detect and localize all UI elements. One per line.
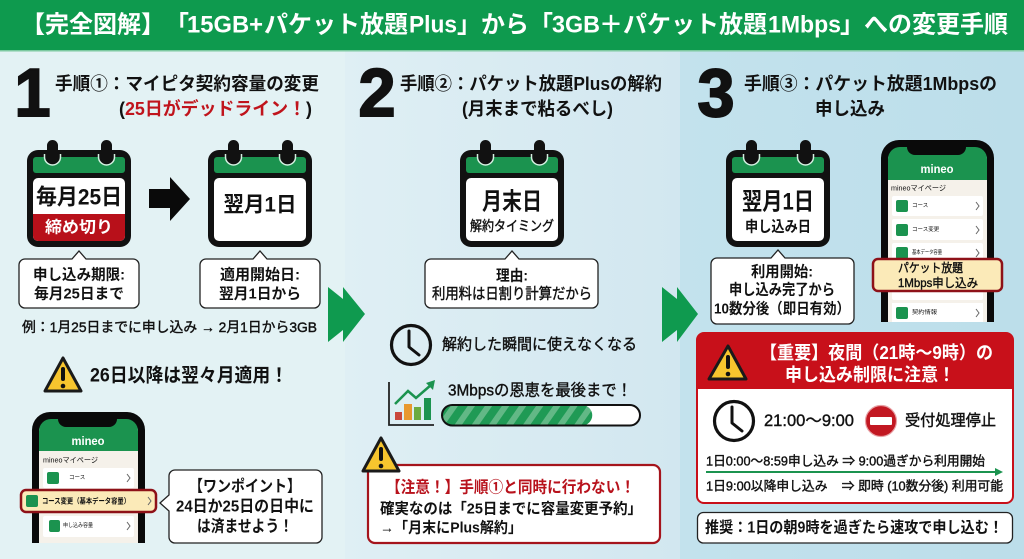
timeline arrow [706,468,1003,476]
phone mockup: course change: mineo [72,436,104,448]
callout: reason: 利用料は日割り計算だから [432,284,592,302]
callout: start of use: 10数分後（即日有効） [714,300,850,318]
phone mockup: course change: 申し込み容量 [63,521,93,529]
step 3 heading: 手順③：パケット放題1Mbpsの [744,74,997,94]
callout: start date [200,251,320,308]
icon: warning triangle [709,346,746,379]
important box: night restriction: 21:00〜9:00 [764,412,854,430]
phone mockup: 1Mbps application: コース [912,202,928,209]
phone mockup: 1Mbps application: 基本データ容量 [912,248,942,256]
callout: one point tip: 24日か25日の日中に [176,498,314,516]
icon: warning triangle [363,438,399,471]
calendar: 25th deadline: 締め切り [45,218,113,236]
title: 3GB [552,12,600,38]
calendar: first of next month [208,140,312,247]
warning box: do not do simultaneously: →「月末にPlus解約」 [380,518,522,536]
callout: reason [425,251,598,308]
panel: step 1 [0,52,345,559]
calendar: 25th deadline [27,140,131,247]
panel: step 3 [680,52,1024,559]
callout: start of use: 利用開始: [751,264,813,280]
phone mockup: 1Mbps application: mineo [920,164,954,176]
callout: application deadline: 毎月25日まで [34,284,124,302]
step 1 heading: 手順①：マイピタ契約容量の変更 [55,74,319,94]
warning box: do not do simultaneously [363,438,660,543]
callout: reason: 理由: [496,268,528,284]
callout: one point tip: 【ワンポイント】 [189,478,301,496]
phone mockup: course change: mineoマイページ [43,456,98,464]
highlighted menu row [873,259,1002,291]
callout: start of use: 申し込み完了から [729,280,835,298]
step number 2: 2 [358,55,396,131]
important box: night restriction: 申し込み制限に注意！ [785,365,955,385]
title: 」から [457,12,529,38]
icon: no entry [866,406,896,436]
title: 15GB+ [187,12,263,38]
arrow: deadline to start [149,177,190,221]
phone mockup: 1Mbps application [873,140,1002,322]
example text: 例：1月25日までに申し込み → 2月1日から3GB [22,319,317,335]
calendar: first of next month: 翌月1日 [224,194,296,216]
step 2 heading: 手順②：パケット放題Plusの解約 [400,74,662,94]
icon: warning triangle [45,358,81,391]
recommendation box: 推奨：1日の朝9時を過ぎたら速攻で申し込む！ [705,518,1003,536]
warning box: do not do simultaneously: 確実なのは「25日までに容量変更予約」 [380,500,642,518]
step 3 subheading: 申し込み [815,99,885,119]
title [21,12,1008,38]
icon: clock [714,402,754,440]
important box: night restriction: 1日0:00〜8:59申し込み ⇒ 9:00過ぎから利用開始 [706,454,985,468]
step 2 subheading: (月末まで粘るべし) [462,99,613,119]
icon: clock [392,326,430,364]
title: パケット放題 [264,12,408,38]
callout: application deadline: 申し込み期限: [33,266,125,284]
calendar: application day [726,140,830,247]
callout: one point tip: は済ませよう！ [197,516,293,536]
calendar: application day: 申し込み日 [745,218,811,236]
phone mockup: course change [21,412,156,543]
step 1 deadline subheading: (25日がデッドライン！) [119,98,312,119]
arrow: step 2 to step 3 [662,287,698,342]
calendar: 25th deadline: 毎月25日 [36,184,122,210]
highlighted menu row: コース変更（基本データ容量） [42,496,130,506]
callout: start date: 翌月1日から [219,286,301,302]
title: 「 [529,12,553,38]
text: unusable on cancellation: 解約した瞬間に使えなくなる [442,336,637,354]
calendar: application day: 翌月1日 [742,188,814,216]
title: 」への変更手順 [840,12,1008,38]
calendar: end of month [460,140,564,247]
important box: night restriction [697,333,1013,503]
callout: start date: 適用開始日: [220,266,300,284]
title: 1Mbps [768,12,841,38]
title: Plus [409,12,457,38]
important box: night restriction: 受付処理停止 [905,412,996,430]
step number 3: 3 [698,55,734,131]
arrow: step 1 to step 2 [328,287,365,342]
phone mockup: 1Mbps application: mineoマイページ [891,184,946,192]
important box: night restriction: 【重要】夜間（21時〜9時）の [760,343,993,363]
important box: night restriction: 1日9:00以降申し込み ⇒ 即時 (10数分後) 利用可能 [706,478,1003,494]
highlighted menu row: 1Mbps申し込み [898,276,978,290]
step number 1: 1 [14,55,50,131]
calendar: end of month: 解約タイミング [470,218,554,234]
progress bar [442,405,640,426]
callout: application deadline [19,251,139,308]
warning box: do not do simultaneously: 【注意！】手順①と同時に行わない！ [386,478,635,496]
callout: start of use [711,250,854,324]
icon: rising bar chart [389,380,435,425]
phone mockup: 1Mbps application: 契約情報 [912,308,938,316]
calendar: end of month: 月末日 [482,188,542,216]
phone mockup: course change: コース [69,474,85,481]
highlighted menu row: パケット放題 [898,260,963,275]
text: 3Mbps benefit: 3Mbpsの恩恵を最後まで！ [448,382,632,400]
panel: step 2 [345,52,680,559]
header banner [0,0,1024,52]
title: 「 [165,12,189,38]
recommendation box [698,512,1012,543]
phone mockup: 1Mbps application: コース変更 [912,225,940,233]
title: ＋パケット放題 [599,12,767,38]
callout: one point tip [160,470,322,543]
red header [697,333,1013,389]
warning text: after the 26th: 26日以降は翌々月適用！ [90,364,288,386]
title: 【完全図解】 [21,12,165,38]
